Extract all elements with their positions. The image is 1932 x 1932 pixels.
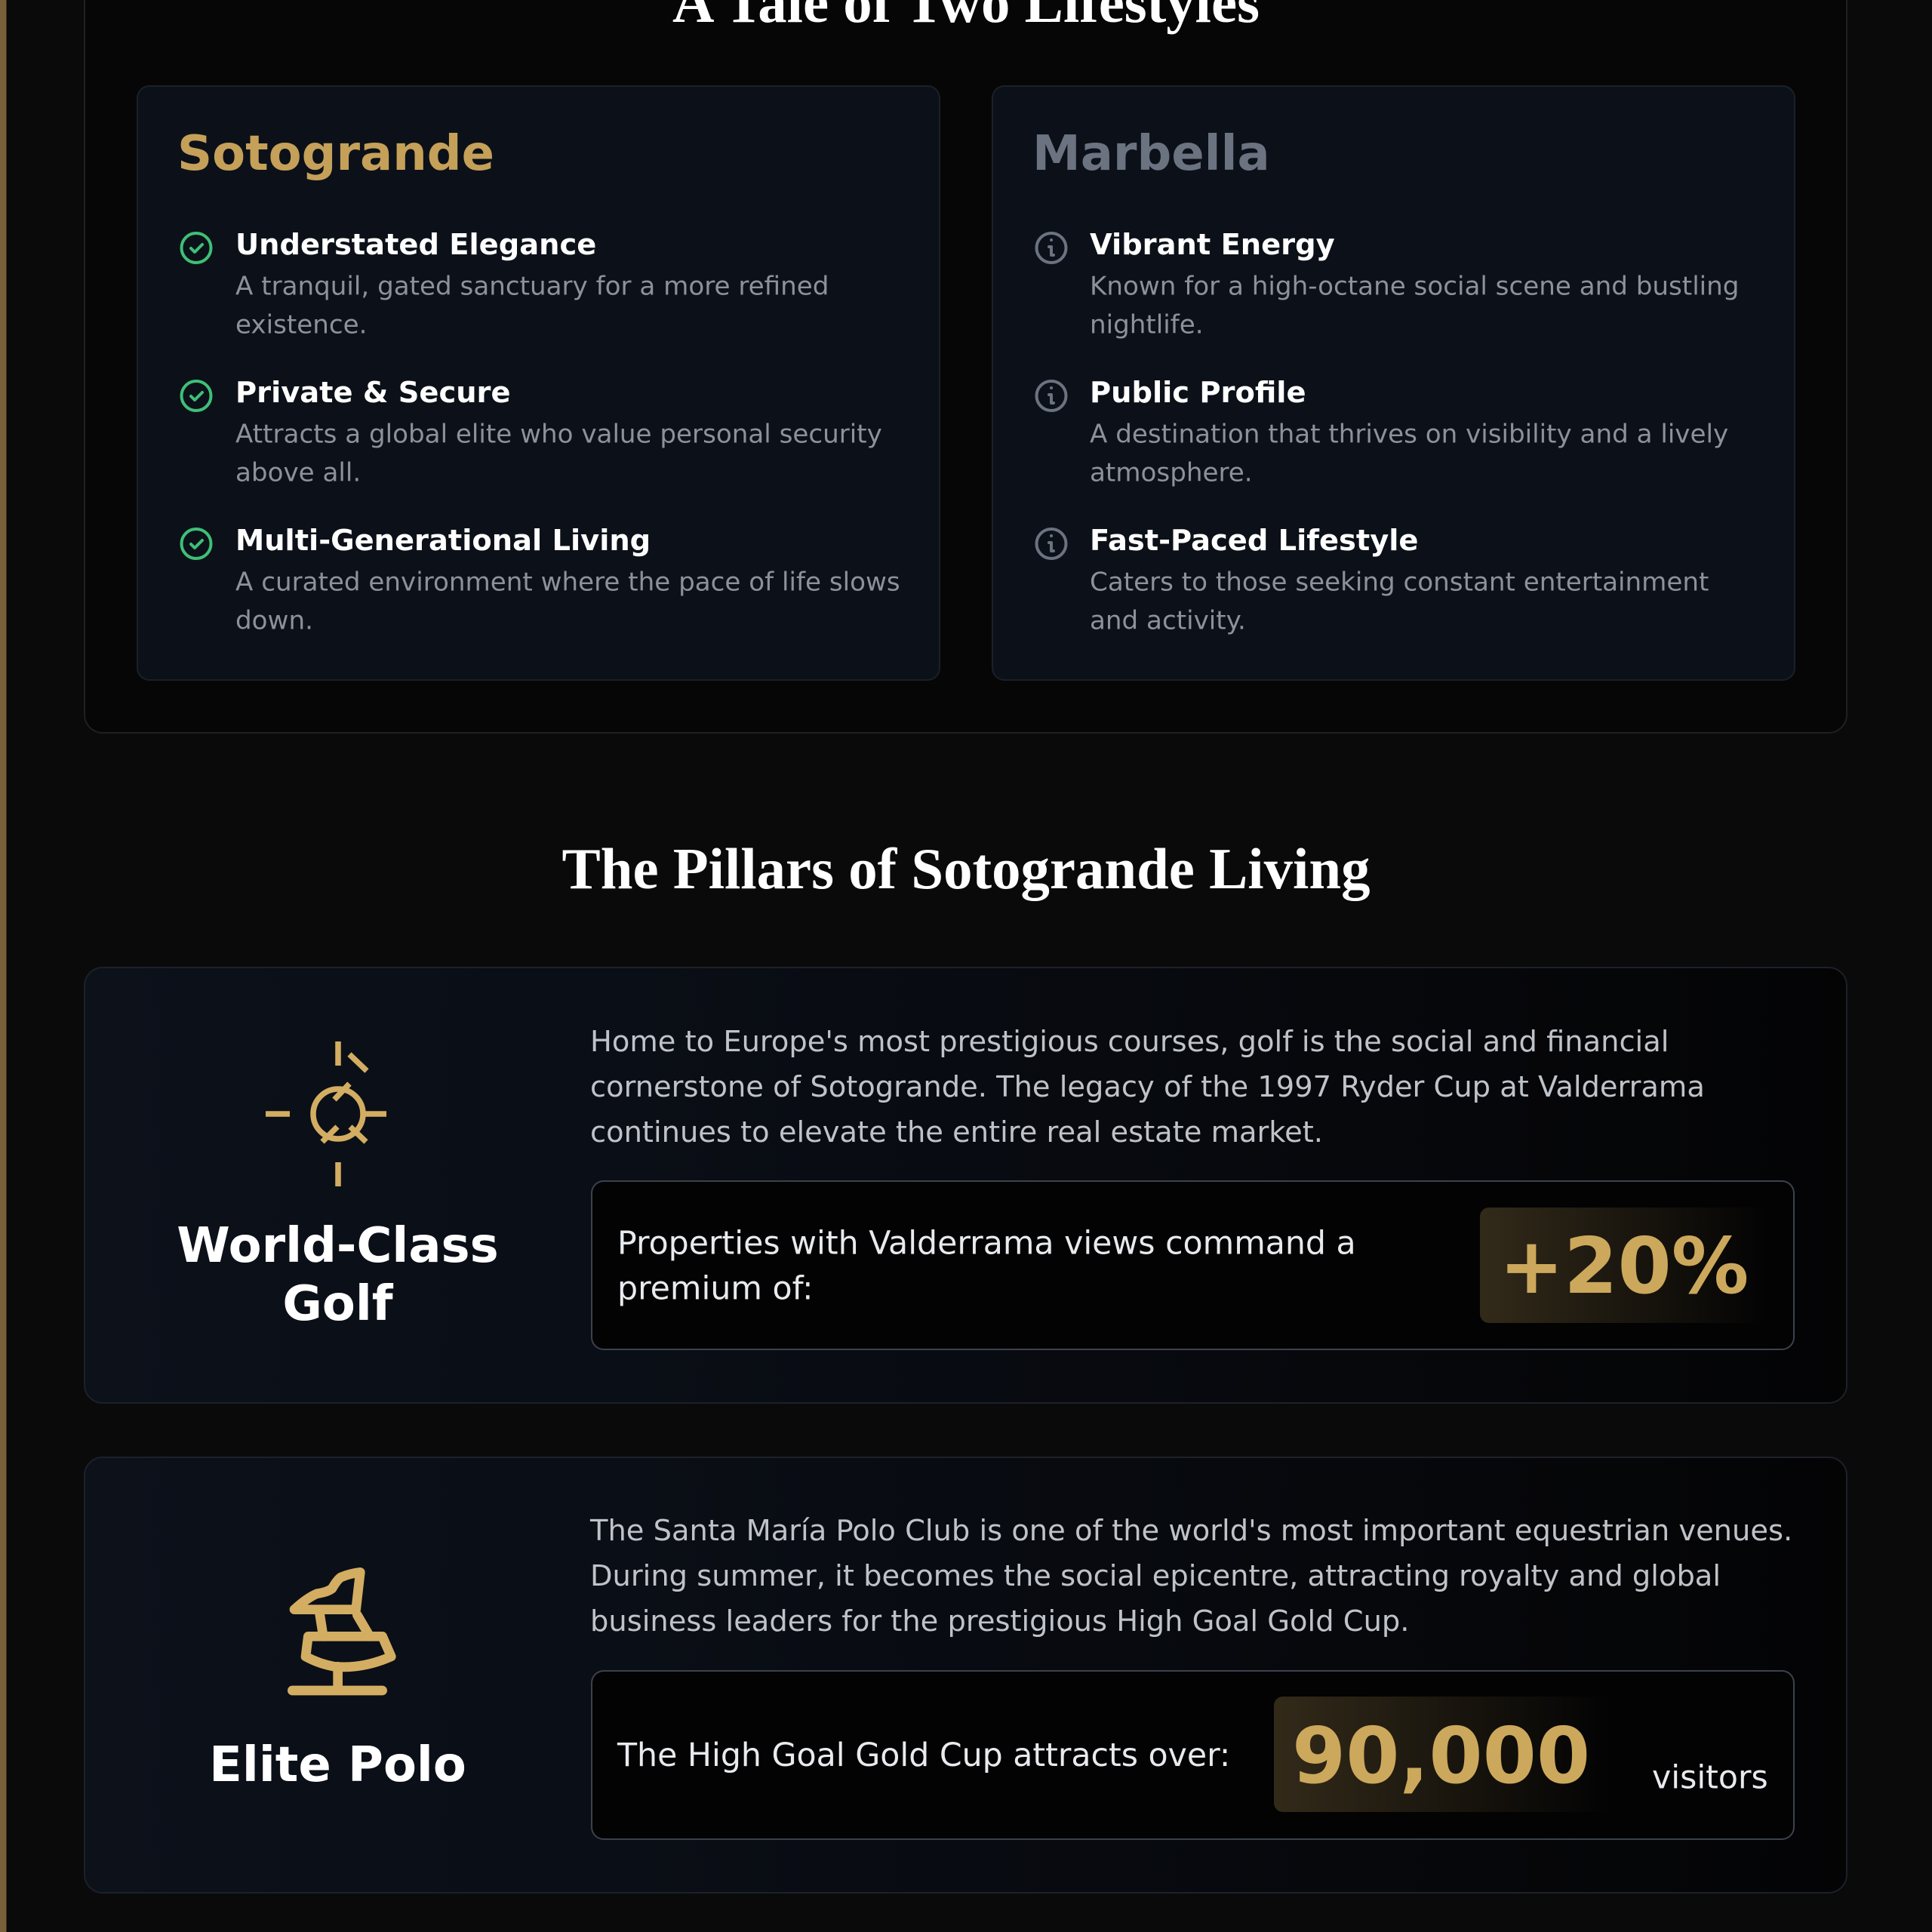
description: polo xyxy=(589,1514,1792,1638)
description: golf xyxy=(590,1025,1705,1149)
item: multi-generational living: down. xyxy=(235,605,313,635)
item: public profile: A destination that thrives on visibility and a lively xyxy=(1090,420,1728,450)
item: vibrant energy: Known for a high-octane social scene and bustling xyxy=(1090,272,1739,302)
description: polo: During summer, it becomes the social epicentre, attracting royalty and global xyxy=(590,1559,1721,1593)
stat box: gold cup visitors: 90,000 xyxy=(1292,1712,1590,1801)
item: private and secure: Attracts a global elite who value personal security xyxy=(235,420,882,450)
stat box: valderrama premium: +20% xyxy=(1499,1222,1749,1312)
description: polo: The Santa María Polo Club is one of the world's most important equestrian venues. xyxy=(589,1514,1792,1548)
title: world-class golf: Golf xyxy=(282,1276,394,1332)
item: vibrant energy: Vibrant Energy xyxy=(1090,228,1335,262)
card: marbella xyxy=(992,86,1795,680)
card heading: marbella: Marbella xyxy=(1032,126,1270,182)
stat box: valderrama premium: Properties with Valderrama views command a xyxy=(617,1224,1356,1262)
item: understated elegance: A tranquil, gated sanctuary for a more refined xyxy=(235,272,829,302)
description: polo: business leaders for the prestigious High Goal Gold Cup. xyxy=(590,1604,1409,1638)
item: private and secure: Private & Secure xyxy=(235,376,511,410)
item: public profile: Public Profile xyxy=(1090,376,1306,410)
heading: the pillars of sotogrande living: The Pillars of Sotogrande Living xyxy=(562,837,1370,901)
item: vibrant energy: nightlife. xyxy=(1090,309,1204,340)
item: understated elegance: Understated Elegance xyxy=(235,228,596,262)
icon: polo xyxy=(292,1572,391,1690)
item: multi-generational living: A curated environment where the pace of life slows xyxy=(235,568,900,598)
title: world-class golf: World-Class xyxy=(177,1218,499,1274)
item: multi-generational living xyxy=(181,524,900,635)
item: fast-paced lifestyle: Fast-Paced Lifestyle xyxy=(1090,524,1418,558)
item: understated elegance xyxy=(181,228,829,340)
item: private and secure: above all. xyxy=(235,457,361,488)
item: public profile xyxy=(1037,376,1728,488)
description: golf: cornerstone of Sotogrande. The legacy of the 1997 Ryder Cup at Valderrama xyxy=(590,1070,1705,1104)
item: multi-generational living: Multi-Generational Living xyxy=(235,524,651,558)
title: world-class golf xyxy=(177,1218,499,1332)
card heading: sotogrande: Sotogrande xyxy=(177,126,494,182)
card: sotogrande xyxy=(137,86,940,680)
panel: a tale of two lifestyles xyxy=(85,0,1847,733)
stat box: gold cup visitors xyxy=(592,1671,1794,1839)
description: golf: continues to elevate the entire real estate market. xyxy=(590,1115,1323,1149)
stat box: valderrama premium: premium of: xyxy=(617,1269,813,1307)
description: golf: Home to Europe's most prestigious courses, golf is the social and financial xyxy=(590,1025,1669,1059)
icon: golf xyxy=(266,1041,386,1186)
title: elite polo: Elite Polo xyxy=(209,1737,466,1793)
item: private and secure xyxy=(181,376,882,488)
item: fast-paced lifestyle: Caters to those seeking constant entertainment xyxy=(1090,568,1709,598)
panel: elite polo xyxy=(85,1457,1847,1893)
item: vibrant energy xyxy=(1037,228,1739,340)
item: fast-paced lifestyle: and activity. xyxy=(1090,605,1246,635)
stat box: gold cup visitors: The High Goal Gold Cup attracts over: xyxy=(617,1737,1230,1774)
panel: world-class golf xyxy=(85,968,1847,1403)
stat box: gold cup visitors: visitors xyxy=(1652,1758,1768,1796)
item: fast-paced lifestyle xyxy=(1037,524,1709,635)
left accent bar xyxy=(0,0,6,1932)
stat box: valderrama premium xyxy=(592,1181,1794,1349)
item: public profile: atmosphere. xyxy=(1090,457,1253,488)
item: understated elegance: existence. xyxy=(235,309,367,340)
